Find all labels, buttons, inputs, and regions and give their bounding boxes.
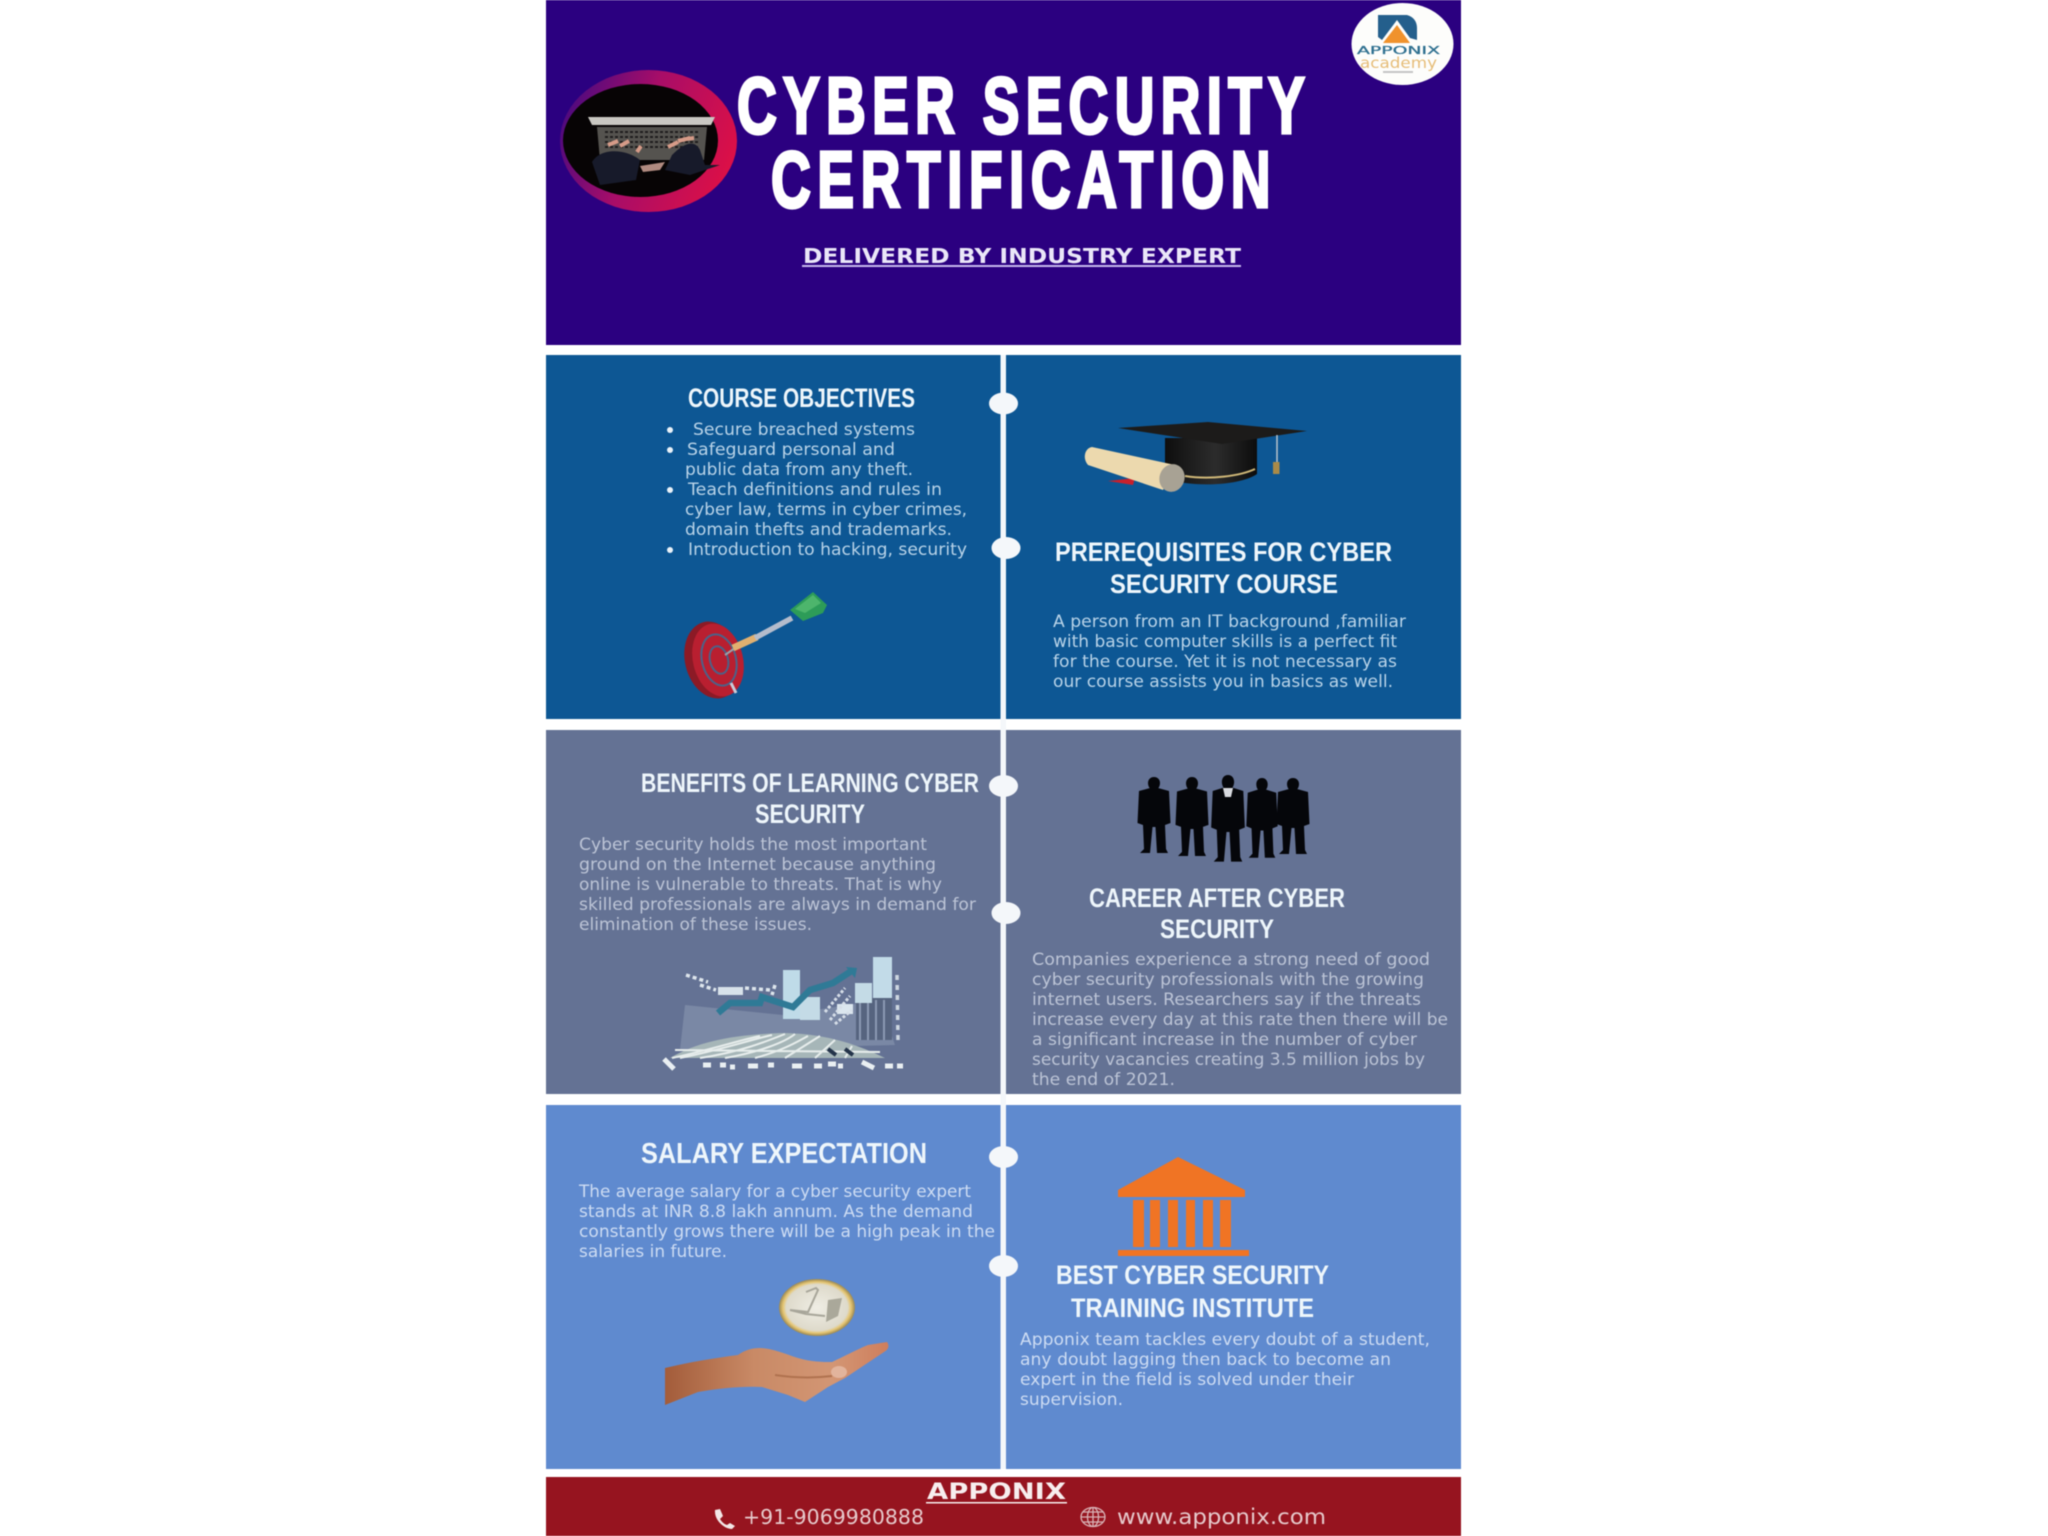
text: benefits body: skilled professionals are always in demand for (579, 895, 976, 915)
text: institute body (1020, 1330, 1430, 1410)
text: institute body: Apponix team tackles every doubt of a student, (1020, 1330, 1430, 1350)
text: benefits body: online is vulnerable to threats. That is why (579, 875, 942, 895)
text: career body: Companies experience a strong need of good (1032, 950, 1430, 970)
footer brand: APPONIX (927, 1480, 1066, 1505)
icon: phone (715, 1509, 735, 1529)
text: prerequisites body: with basic computer skills is a perfect fit (1053, 632, 1397, 652)
text: prerequisites body: A person from an IT background ,familiar (1053, 612, 1406, 632)
text: benefits body: elimination of these issues. (579, 915, 812, 935)
text: prerequisites body: our course assists you in basics as well. (1053, 672, 1393, 692)
panel: salary and institute (546, 1105, 1461, 1469)
icon: coin (779, 1279, 855, 1336)
text: benefits body: ground on the Internet because anything (579, 855, 936, 875)
text: salary body: stands at INR 8.8 lakh annum. As the demand (579, 1202, 973, 1222)
text: career body: security vacancies creating 3.5 million jobs by (1032, 1050, 1425, 1070)
bullet list (667, 420, 967, 560)
heading: best institute: TRAINING INSTITUTE (1071, 1293, 1314, 1323)
heading: best institute (1056, 1260, 1329, 1323)
bullet list: Safeguard personal and (687, 440, 895, 460)
text: benefits body: Cyber security holds the most important (579, 835, 927, 855)
icon: graduation cap and scroll (1085, 422, 1307, 495)
subtitle: DELIVERED BY INDUSTRY EXPERT (803, 244, 1241, 268)
heading: career: CAREER AFTER CYBER (1089, 883, 1345, 913)
text: career body: the end of 2021. (1032, 1070, 1175, 1090)
bullet list: Introduction to hacking, security (688, 540, 967, 560)
heading: benefits (641, 768, 979, 829)
text: prerequisites body (1053, 612, 1406, 692)
logo: Apponix academy (1352, 3, 1454, 85)
icon: institute building (1118, 1157, 1249, 1256)
text: salary body: The average salary for a cyber security expert (578, 1182, 971, 1202)
heading: course objectives: COURSE OBJECTIVES (688, 383, 915, 413)
text: career body: a significant increase in the number of cyber (1032, 1030, 1417, 1050)
title: CERTIFICATION (771, 135, 1271, 224)
heading: prerequisites: SECURITY COURSE (1110, 569, 1338, 599)
heading: best institute: BEST CYBER SECURITY (1056, 1260, 1329, 1290)
bullet list: Secure breached systems (693, 420, 915, 440)
panel: benefits and career (546, 730, 1461, 1094)
logo: Apponix academy: academy (1360, 54, 1437, 72)
text: institute body: supervision. (1020, 1390, 1123, 1410)
text: prerequisites body: for the course. Yet it is not necessary as (1053, 652, 1397, 672)
heading: career (1089, 883, 1345, 944)
bullet list: Teach definitions and rules in (687, 480, 942, 500)
text: salary body (578, 1182, 995, 1262)
heading: benefits: BENEFITS OF LEARNING CYBER (641, 768, 979, 798)
text: institute body: expert in the field is solved under their (1020, 1370, 1354, 1390)
header banner (546, 0, 1461, 345)
heading: salary expectation: SALARY EXPECTATION (641, 1138, 927, 1170)
title (737, 61, 1305, 224)
text: salary body: salaries in future. (579, 1242, 727, 1262)
text: salary body: constantly grows there will be a high peak in the (579, 1222, 995, 1242)
heading: prerequisites (1055, 537, 1392, 599)
title: CYBER SECURITY (737, 61, 1305, 150)
phone number: +91-9069980888 (743, 1505, 924, 1529)
text: career body (1032, 950, 1448, 1090)
bullet list: domain thefts and trademarks. (685, 520, 952, 540)
heading: career: SECURITY (1160, 914, 1274, 944)
timeline divider with dots (989, 355, 1020, 1469)
panel: course objectives and prerequisites (546, 355, 1461, 719)
heading: prerequisites: PREREQUISITES FOR CYBER (1055, 537, 1392, 567)
icon: open hand (665, 1342, 888, 1405)
text: institute body: any doubt lagging then back to become an (1020, 1350, 1391, 1370)
bullet list: public data from any theft. (685, 460, 913, 480)
footer (546, 1477, 1461, 1536)
website: www.apponix.com (1117, 1505, 1326, 1529)
icon: hacker laptop circle (560, 70, 737, 212)
text: benefits body (579, 835, 976, 935)
heading: benefits: SECURITY (755, 799, 865, 829)
icon: globe (1081, 1508, 1105, 1526)
chart illustration: growth and money (664, 957, 903, 1069)
text: career body: increase every day at this rate then there will be (1032, 1010, 1448, 1030)
icon: target and dart (676, 592, 827, 705)
text: career body: internet users. Researchers say if the threats (1032, 990, 1421, 1010)
bullet list: cyber law, terms in cyber crimes, (685, 500, 967, 520)
icon: group of silhouettes (1138, 775, 1310, 862)
text: career body: cyber security professionals with the growing (1032, 970, 1424, 990)
logo: Apponix academy: APPONIX (1357, 44, 1441, 57)
